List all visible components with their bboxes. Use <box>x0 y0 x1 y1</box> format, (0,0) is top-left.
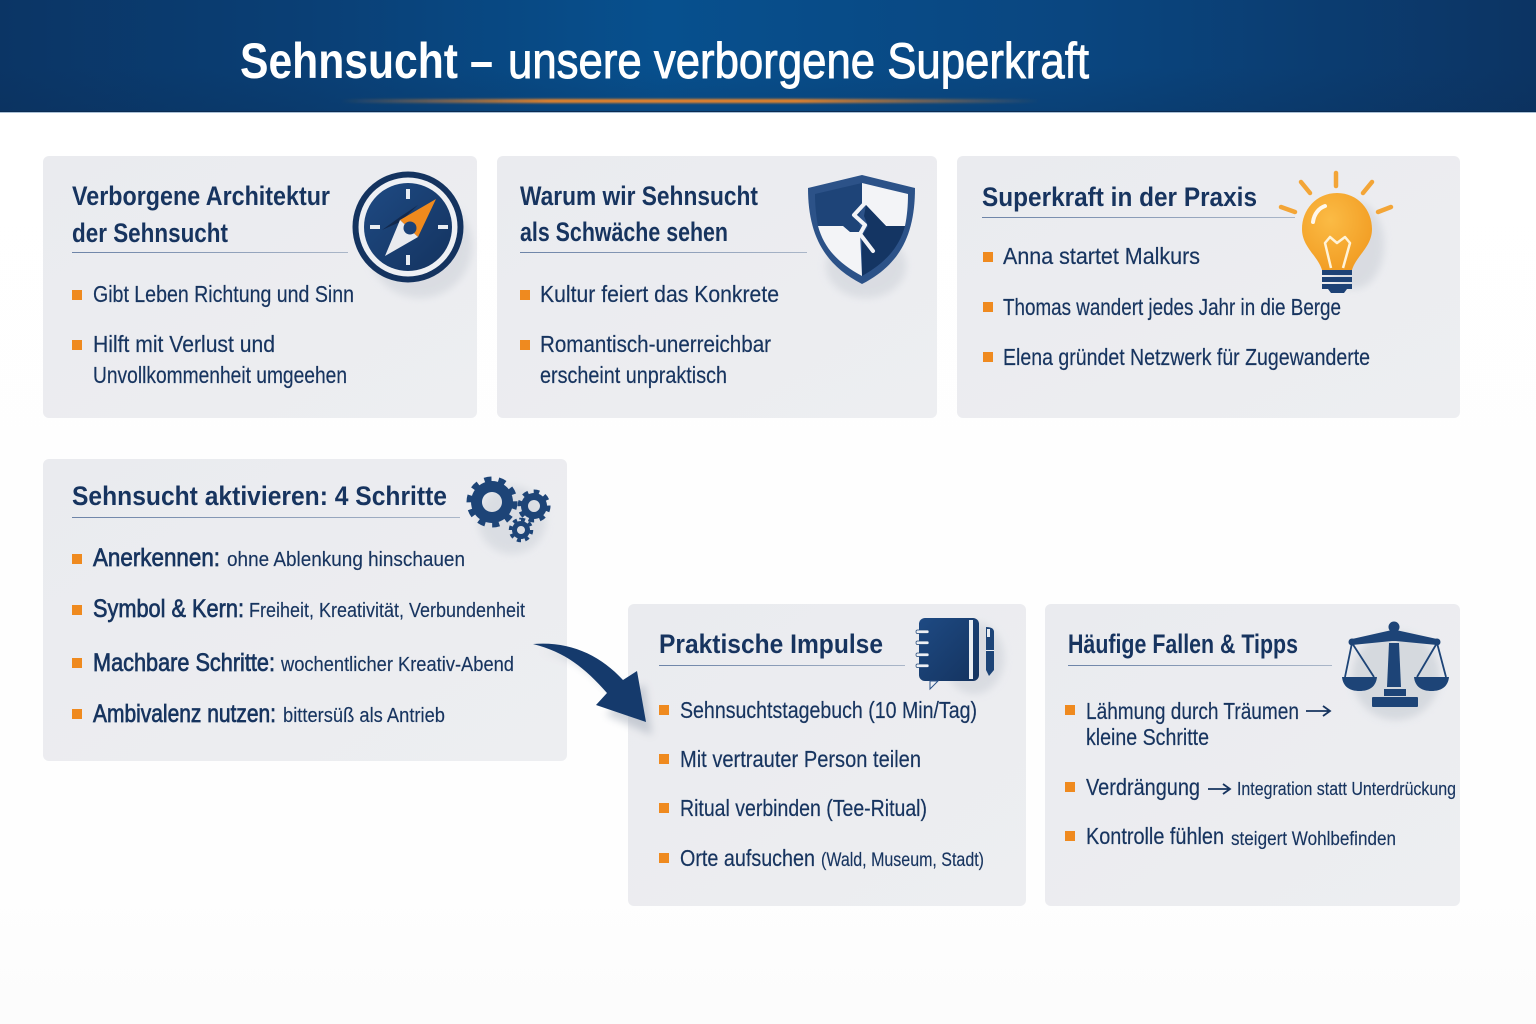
step list: bittersüß als Antrieb <box>283 705 445 727</box>
heading: Superkraft in der Praxis <box>982 182 1257 212</box>
heading: der Sehnsucht <box>72 218 228 248</box>
panel: Häufige Fallen & Tipps <box>1045 604 1460 906</box>
bullet list: Orte aufsuchen <box>680 845 815 871</box>
header banner <box>0 0 1536 113</box>
bullet list: Anna startet Malkurs <box>1003 243 1200 269</box>
bullet list: Elena gründet Netzwerk für Zugewanderte <box>1003 344 1370 370</box>
step list: ohne Ablenkung hinschauen <box>227 549 465 571</box>
bullet list: kleine Schritte <box>1086 724 1209 750</box>
bullet list: Kontrolle fühlen <box>1086 823 1224 849</box>
step list <box>72 544 525 728</box>
heading: als Schwäche sehen <box>520 217 728 247</box>
title: Sehnsucht <box>240 33 458 89</box>
icon: light bulb <box>1281 173 1391 293</box>
icon: gears <box>470 480 548 554</box>
panel: Sehnsucht aktivieren <box>43 459 567 761</box>
heading: Verborgene Architektur <box>72 181 330 211</box>
step list: Machbare Schritte: <box>93 649 275 677</box>
arrow: steps to impulses <box>533 644 652 735</box>
icon: cracked shield <box>808 175 915 298</box>
step list: Symbol & Kern: <box>93 595 244 623</box>
bullet list: Romantisch-unerreichbar <box>540 331 771 357</box>
heading <box>520 181 758 247</box>
bullet list: (Wald, Museum, Stadt) <box>821 850 984 871</box>
bullet list: Lähmung durch Träumen <box>1086 698 1299 724</box>
icon: small arrow <box>1208 784 1230 794</box>
bullet list: Verdrängung <box>1086 774 1200 800</box>
title <box>240 33 1089 89</box>
heading <box>72 181 330 248</box>
bullet list: Unvollkommenheit umgeehen <box>93 362 347 388</box>
heading: Häufige Fallen & Tipps <box>1068 629 1298 659</box>
heading: Warum wir Sehnsucht <box>520 181 758 211</box>
panel: Verborgene Architektur <box>43 156 477 418</box>
heading: Praktische Impulse <box>659 629 883 659</box>
heading: Sehnsucht aktivieren: 4 Schritte <box>72 481 447 511</box>
icon: compass <box>352 172 472 298</box>
bullet list <box>520 281 779 388</box>
bullet list: Ritual verbinden (Tee-Ritual) <box>680 795 927 821</box>
step list: Anerkennen: <box>93 544 220 572</box>
bullet list: steigert Wohlbefinden <box>1231 829 1396 850</box>
bullet list: Gibt Leben Richtung und Sinn <box>93 281 354 307</box>
title: unsere verborgene Superkraft <box>508 33 1089 89</box>
bullet list: Kultur feiert das Konkrete <box>540 281 779 307</box>
bullet list: Mit vertrauter Person teilen <box>680 746 921 772</box>
bullet list <box>983 243 1370 370</box>
step list: Freiheit, Kreativität, Verbundenheit <box>249 600 525 622</box>
panel: Praktische Impulse <box>628 604 1026 906</box>
bullet list: Sehnsuchtstagebuch (10 Min/Tag) <box>680 697 977 723</box>
bullet list <box>1065 698 1456 850</box>
step list: Ambivalenz nutzen: <box>93 700 276 728</box>
title: – <box>470 33 493 89</box>
bullet list: Hilft mit Verlust und <box>93 331 275 357</box>
bullet list: erscheint unpraktisch <box>540 362 727 388</box>
step list: wochentlicher Kreativ-Abend <box>280 654 514 676</box>
icon: scales <box>1342 622 1449 720</box>
bullet list <box>72 281 354 388</box>
icon: notebook and pen <box>916 618 1004 694</box>
panel: Superkraft in der Praxis <box>957 156 1460 418</box>
bullet list <box>659 697 984 871</box>
icon: small arrow <box>1306 706 1330 716</box>
bullet list: Integration statt Unterdrückung <box>1237 779 1456 799</box>
bullet list: Thomas wandert jedes Jahr in die Berge <box>1003 294 1341 320</box>
panel: Warum wir Sehnsucht als Schwäche sehen <box>497 156 937 418</box>
